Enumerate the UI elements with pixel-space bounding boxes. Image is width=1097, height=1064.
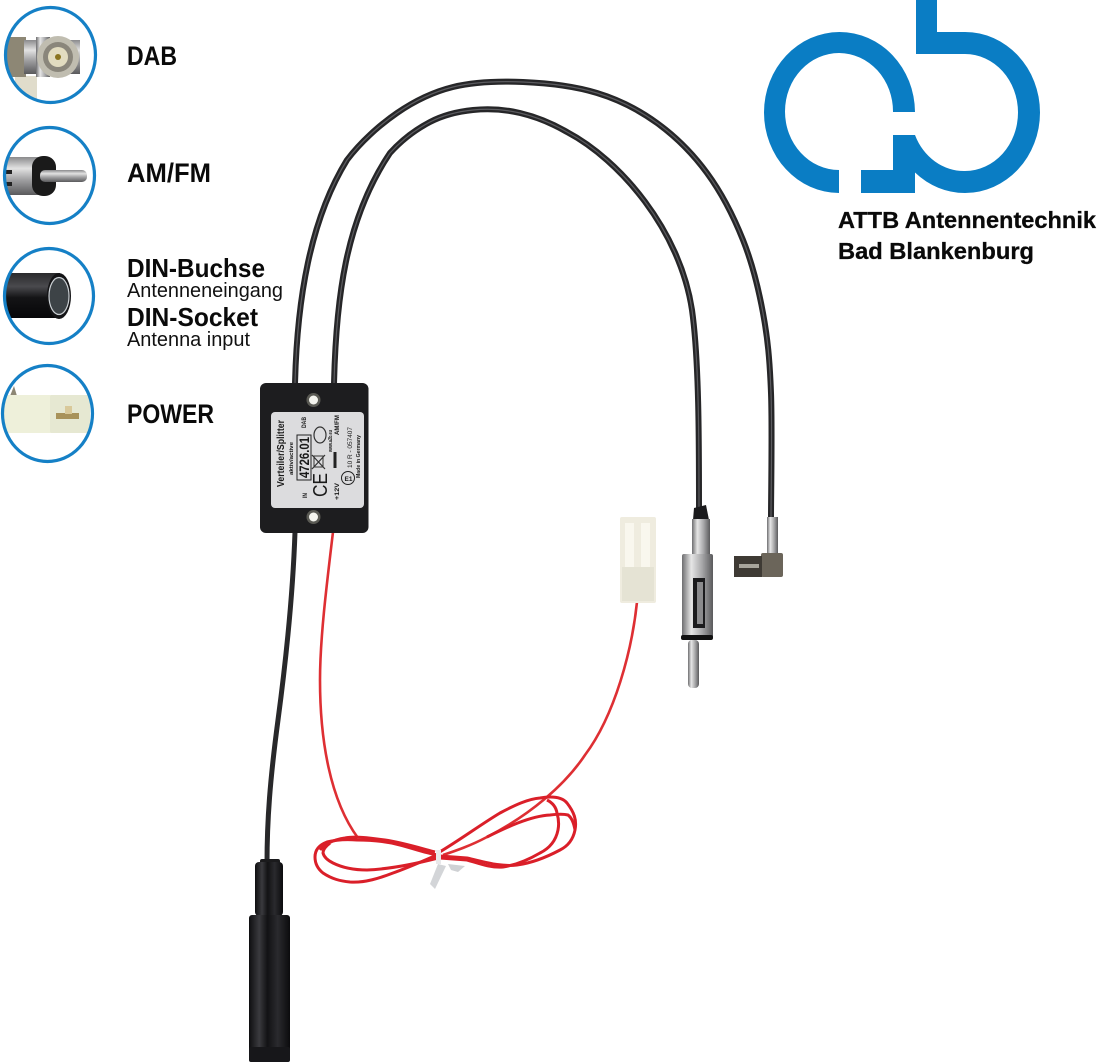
label: DIN-Socket: DIN-Socket	[127, 302, 258, 332]
cable tie	[430, 850, 465, 889]
product: antenna splitter cable assembly	[249, 82, 783, 1062]
label: DIN-Buchse: DIN-Buchse	[127, 253, 265, 283]
logo mark	[764, 0, 1040, 193]
module housing	[260, 383, 368, 533]
label text: +12V	[335, 483, 341, 500]
company name: ATTB Antennentechnik	[838, 207, 1097, 233]
label text: aktiv/active	[289, 442, 295, 475]
power plug	[620, 517, 656, 603]
DIN antenna socket	[249, 859, 290, 1062]
label text: E1	[344, 476, 353, 483]
right-angle DAB connector	[734, 517, 783, 577]
label text: Verteiler/Splitter	[276, 420, 287, 487]
red power wire from connector	[443, 602, 637, 855]
label: Antenneneingang: Antenneneingang	[127, 280, 283, 302]
label text: 4726.01	[296, 437, 312, 478]
red wire coil	[315, 797, 576, 882]
label text: www.a2b.eu	[328, 430, 334, 453]
ISO antenna plug	[681, 505, 713, 688]
company logo	[764, 0, 1097, 264]
DAB cable	[295, 82, 772, 517]
label text	[276, 415, 362, 500]
company location: Bad Blankenburg	[838, 238, 1034, 264]
label text: AM/FM	[335, 415, 341, 435]
label: Antenna input: Antenna input	[127, 329, 250, 351]
label text: Made in Germany	[356, 434, 362, 478]
label: POWER: POWER	[127, 399, 214, 429]
product label	[271, 412, 364, 508]
label text: IN	[303, 493, 309, 498]
icon: power connector photo	[0, 366, 92, 462]
label text: 10 R - 057407	[348, 426, 354, 468]
AM/FM cable	[334, 109, 699, 508]
legend: AM/FM connector	[0, 128, 211, 224]
legend: DAB connector	[0, 8, 177, 102]
label text: CE	[310, 473, 332, 497]
label text: DAB	[302, 416, 308, 428]
red power wire from module	[320, 532, 358, 838]
legend: DIN socket	[0, 248, 283, 351]
icon: AM/FM plug photo	[0, 128, 94, 224]
mounting holes	[306, 393, 320, 524]
label: AM/FM: AM/FM	[127, 158, 211, 188]
legend: power connector	[0, 366, 214, 462]
icon: DIN socket photo	[0, 248, 94, 344]
antenna input cable	[267, 532, 295, 864]
splitter module	[260, 383, 368, 533]
icon: DAB connector photo	[0, 8, 96, 102]
label: DAB: DAB	[127, 41, 177, 71]
